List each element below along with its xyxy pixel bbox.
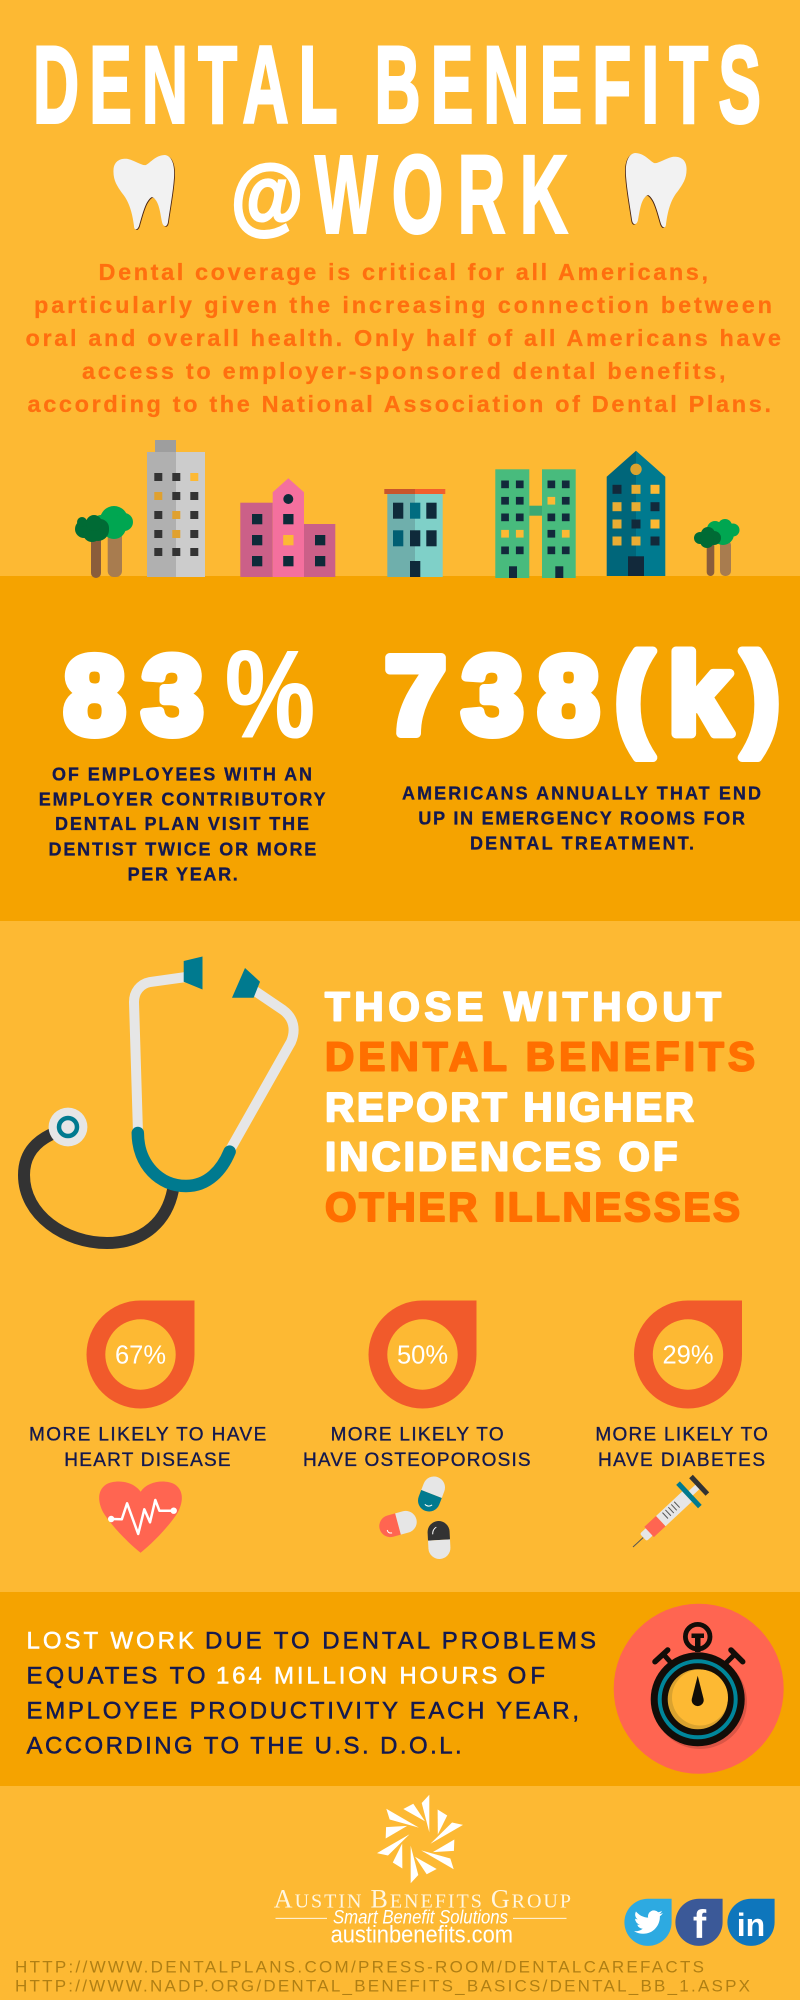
heading: those without dental benefits: REPORT HIGHER [325, 1084, 694, 1130]
stat caption: emergency rooms: DENTAL TREATMENT. [470, 834, 694, 854]
intro text block [26, 259, 781, 417]
stat ring: 67 percent heart disease [87, 1300, 194, 1408]
icon: stopwatch [614, 1604, 784, 1774]
stat: 83 percent [39, 626, 326, 884]
icon: pills [377, 1473, 451, 1560]
icon: facebook [675, 1899, 723, 1947]
heading: those without dental benefits: OTHER ILLNESSES [325, 1184, 740, 1230]
logo: starburst [373, 1795, 467, 1883]
icon: twitter [624, 1899, 672, 1946]
caption: heart disease: MORE LIKELY TO HAVE [29, 1425, 266, 1446]
heading: those without dental benefits: THOSE WITHOUT [325, 984, 721, 1030]
stat ring: 29 percent diabetes [634, 1300, 742, 1408]
text block: lost work: LOST WORK [26, 1628, 194, 1655]
stat caption: emergency rooms [402, 784, 761, 854]
text block: lost work: 164 MILLION HOURS [216, 1663, 497, 1690]
icon: syringe [622, 1472, 712, 1559]
stat ring: 29 percent diabetes: 29% [662, 1342, 714, 1370]
stat caption: employees: PER YEAR. [128, 864, 238, 884]
logo text: Austin Benefits Group: AUSTIN BENEFITS GROUP [274, 1884, 571, 1913]
text block: lost work: EMPLOYEE PRODUCTIVITY EACH YEAR, [26, 1698, 579, 1724]
icon: teal building [384, 489, 445, 577]
title: Dental Benefits: DENTAL BENEFITS [33, 25, 761, 147]
icon: gray tower [147, 440, 205, 577]
stat caption: emergency rooms: UP IN EMERGENCY ROOMS FOR [418, 808, 745, 828]
intro text block: access to employer-sponsored dental benefits, [82, 358, 726, 384]
logo text: Austin Benefits Group: austinbenefits.com [331, 1921, 513, 1948]
icon: left trees [75, 506, 133, 578]
icon: right tooth [625, 153, 687, 228]
text block: lost work: OF [508, 1663, 545, 1690]
icon: green twin towers [495, 469, 576, 578]
stat: 738k: (k) [615, 632, 780, 759]
caption: heart disease: HEART DISEASE [64, 1450, 231, 1471]
caption: osteoporosis [303, 1425, 531, 1471]
stat caption: emergency rooms: AMERICANS ANNUALLY THAT END [402, 784, 761, 804]
heading: those without dental benefits: INCIDENCES OF [325, 1133, 678, 1179]
source links: HTTP://WWW.NADP.ORG/DENTAL_BENEFITS_BASICS/DENTAL_BB_1.ASPX [15, 1977, 750, 1996]
caption: osteoporosis: MORE LIKELY TO [331, 1425, 504, 1446]
stat ring: 67 percent heart disease: 67% [115, 1342, 166, 1370]
stat caption: employees [39, 765, 326, 884]
text block: lost work: ACCORDING TO THE U.S. D.O.L. [26, 1732, 462, 1759]
title: @Work: WORK [315, 134, 568, 257]
logo text: Austin Benefits Group [274, 1884, 571, 1948]
stat ring: 50 percent osteoporosis: 50% [397, 1342, 448, 1370]
stat: 83 percent: 83 [64, 634, 203, 758]
stat ring: 50 percent osteoporosis [368, 1300, 476, 1408]
panel: lost work band [0, 1592, 800, 1786]
caption: diabetes [595, 1425, 768, 1471]
stat: 738k: 738 [385, 634, 599, 758]
stat caption: employees: DENTAL PLAN VISIT THE [55, 814, 309, 834]
stat: 738k [385, 632, 780, 854]
text block: lost work [26, 1628, 596, 1759]
icon: heart with pulse [99, 1482, 182, 1553]
caption: diabetes: HAVE DIABETES [598, 1450, 765, 1471]
intro text block: Dental coverage is critical for all Americans, [98, 259, 708, 285]
stat caption: employees: DENTIST TWICE OR MORE [48, 840, 316, 860]
caption: diabetes: MORE LIKELY TO [595, 1425, 768, 1446]
icon: left tooth [113, 155, 175, 230]
icon: facebook: f [693, 1903, 707, 1947]
caption: osteoporosis: HAVE OSTEOPOROSIS [303, 1450, 531, 1471]
text block: lost work: DUE TO DENTAL PROBLEMS [205, 1628, 596, 1655]
stat caption: employees: OF EMPLOYEES WITH AN [52, 765, 312, 785]
stat: 83 percent: % [225, 626, 315, 764]
intro text block: oral and overall health. Only half of all Americans have [26, 325, 781, 351]
icon: right trees [694, 519, 740, 576]
icon: blue gabled building [607, 451, 665, 576]
caption: heart disease [29, 1425, 266, 1471]
title: @Work: @ [231, 148, 303, 242]
heading: those without dental benefits [325, 984, 755, 1230]
panel: stats band [0, 576, 800, 921]
icon: stethoscope [24, 956, 294, 1243]
text block: lost work: EQUATES TO [26, 1663, 206, 1690]
stat caption: employees: EMPLOYER CONTRIBUTORY [39, 789, 326, 809]
heading: those without dental benefits: DENTAL BENEFITS [325, 1033, 755, 1079]
icon: linkedin: in [737, 1907, 765, 1943]
source links [15, 1957, 750, 1996]
source links: HTTP://WWW.DENTALPLANS.COM/PRESS-ROOM/DENTALCAREFACTS [15, 1957, 704, 1976]
intro text block: according to the National Association of Dental Plans. [28, 391, 771, 417]
intro text block: particularly given the increasing connection between [34, 292, 772, 318]
logo text: Austin Benefits Group: Smart Benefit Solutions [333, 1906, 508, 1928]
icon: linkedin [727, 1899, 775, 1946]
icon: pink building [240, 478, 335, 577]
